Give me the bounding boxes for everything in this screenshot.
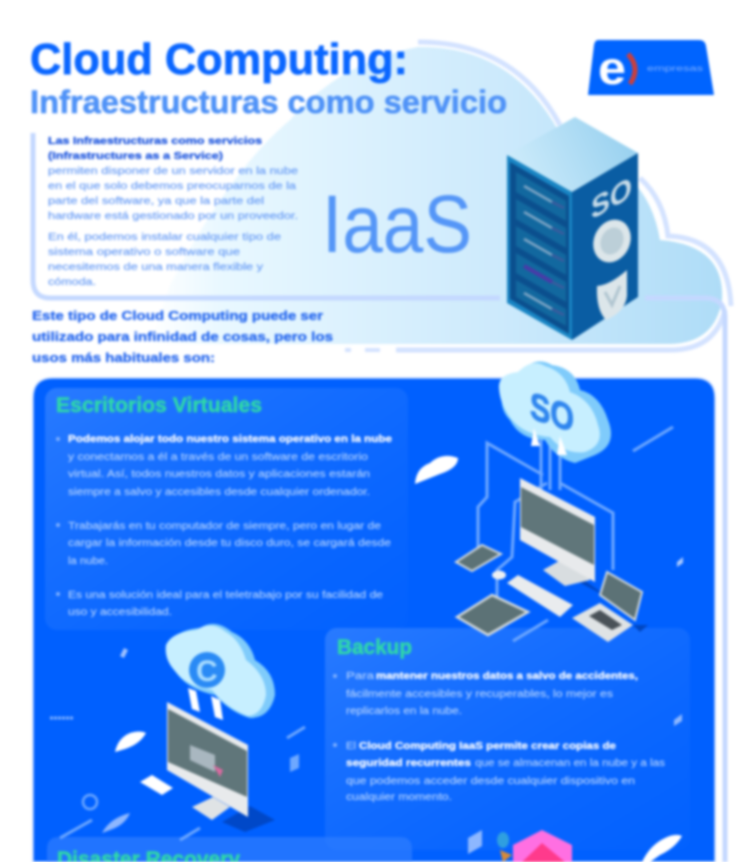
panel: Escritorios Virtuales: la nube.	[68, 556, 108, 567]
IaaS label: IaaS	[322, 179, 472, 270]
icon: desktop monitor	[520, 478, 622, 605]
panel: Backup: que podemos acceder desde cualquier dispositivo en	[346, 776, 635, 787]
panel: Backup: fácilmente accesibles y recuperables, lo mejor es	[346, 689, 613, 700]
illustration: copyright cloud and monitor	[50, 624, 305, 840]
icon: white cloud	[115, 732, 146, 752]
panel: Escritorios Virtuales: Trabajarás en tu computador de siempre, pero en lugar de	[68, 521, 382, 532]
background cloud	[150, 42, 731, 350]
icon: keyboard	[507, 575, 573, 617]
intro text: permiten disponer de un servidor en la nube	[48, 165, 298, 177]
icon: SO cloud: SO	[530, 385, 574, 441]
panel: Escritorios Virtuales: Escritorios Virtuales	[56, 394, 262, 417]
icon: mouse	[492, 570, 506, 580]
icon: shield	[597, 270, 627, 320]
icon: white cloud	[415, 456, 458, 484]
icon: copyright cloud: C	[196, 655, 218, 688]
panel: Backup: cualquier momento.	[346, 792, 452, 803]
intro text: cómoda.	[48, 276, 96, 288]
panel: Backup: que se almacenan en la nube y a las	[475, 758, 665, 769]
panel: Backup	[325, 628, 690, 850]
intro text: Las Infraestructuras como servicios	[48, 135, 262, 147]
panel: Escritorios Virtuales: cargar la información desde tu disco duro, se cargará desde	[68, 538, 392, 549]
lead-in text: Este tipo de Cloud Computing puede ser	[32, 308, 323, 323]
logo	[588, 40, 714, 95]
icon: keyboard	[140, 775, 173, 795]
intro text: parte del software, ya que la parte del	[48, 195, 264, 207]
panel: Escritorios Virtuales: y conectarnos a él a través de un software de escritorio	[68, 452, 369, 463]
illustration: devices connected to cloud	[415, 361, 683, 642]
panel: Backup: Cloud Computing IaaS permite crear copias de	[359, 741, 616, 752]
panel: Escritorios Virtuales: uso y accesibilidad.	[68, 607, 172, 618]
illustration: hexagon bottom	[468, 714, 682, 862]
panel: Escritorios Virtuales: virtual. Así, todos nuestros datos y aplicaciones estarán	[68, 469, 370, 480]
lead-in text: utilizado para infinidad de cosas, pero los	[32, 329, 333, 344]
panel: Escritorios Virtuales	[45, 388, 408, 630]
server icon	[507, 117, 638, 340]
logo: e	[598, 42, 626, 94]
panel: Escritorios Virtuales: Es una solución ideal para el teletrabajo por su facilidad de	[68, 590, 384, 601]
logo: empresas	[647, 64, 703, 73]
icon: phone	[456, 545, 501, 571]
panel: Backup: Backup	[337, 636, 412, 659]
intro text: (Infrastructures as a Service)	[48, 150, 223, 162]
panel: Escritorios Virtuales: siempre a salvo y accesibles desde cualquier ordenador.	[68, 487, 370, 498]
connection lines	[478, 440, 613, 603]
icon: tablet	[457, 595, 528, 635]
icon: check circle	[586, 213, 638, 269]
intro text: en el que solo debemos preocuparnos de la	[48, 180, 296, 192]
panel: use cases	[33, 378, 715, 862]
intro text: hardware está gestionado por un proveedor.	[48, 210, 298, 222]
intro text: sistema operativo o software que	[48, 246, 240, 258]
icon: laptop	[572, 572, 648, 642]
intro text: necesitemos de una manera flexible y	[48, 261, 264, 273]
icon: SO cloud	[499, 361, 611, 463]
panel: Backup: mantener nuestros datos a salvo de accidentes,	[376, 671, 638, 682]
bracket frame line	[33, 133, 725, 862]
intro text	[48, 135, 298, 288]
subtitle: Infraestructuras como servicio	[30, 84, 507, 120]
panel: Escritorios Virtuales: Podemos alojar todo nuestro sistema operativo en la nube	[68, 434, 392, 445]
icon: monitor	[167, 702, 248, 820]
panel: Backup: seguridad recurrentes	[346, 758, 472, 769]
title: Cloud Computing:	[30, 35, 408, 84]
panel: Disaster Recovery	[47, 837, 412, 862]
panel: Backup: replicarlos en la nube.	[346, 706, 462, 717]
intro text: En él, podemos instalar cualquier tipo de	[48, 231, 281, 243]
lead-in text	[32, 308, 333, 365]
icon: copyright cloud	[166, 624, 275, 718]
lead-in text: usos más habituales son:	[32, 350, 215, 365]
panel: Backup: Para	[346, 671, 375, 682]
icon: SO text: SO	[591, 169, 632, 226]
panel: Backup: El	[346, 741, 356, 752]
